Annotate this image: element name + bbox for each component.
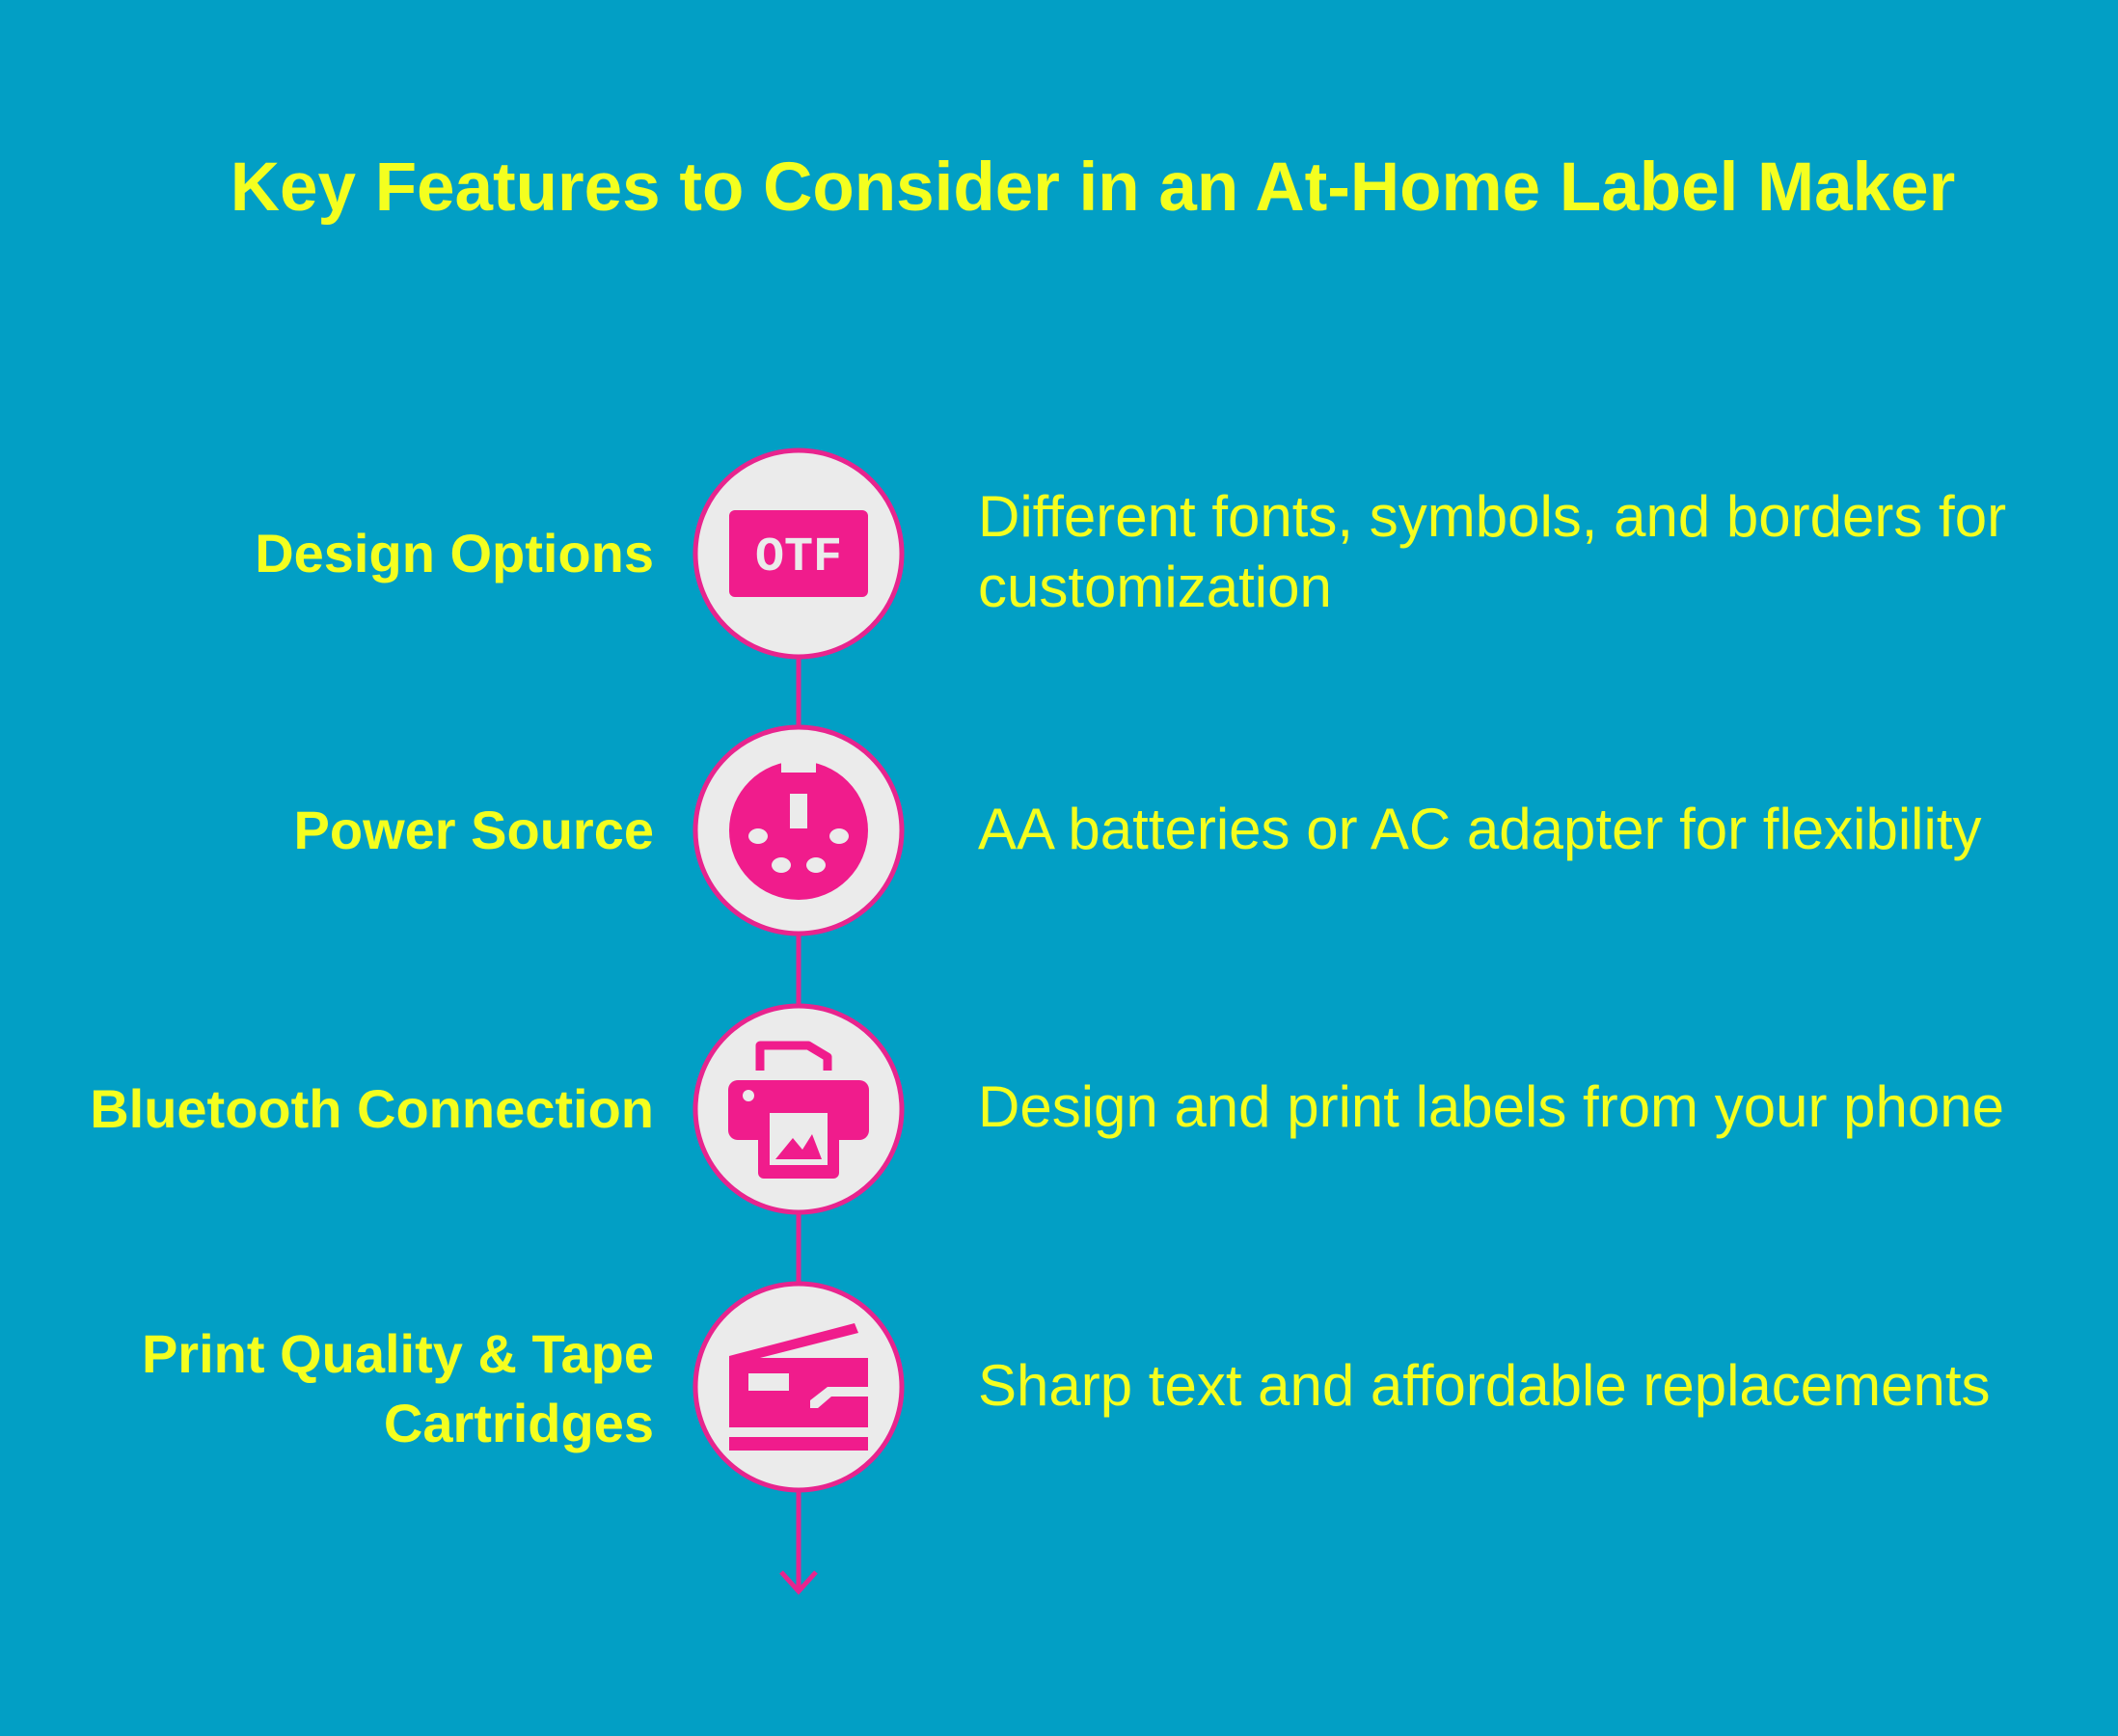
icon: OTF: OTF [755,530,842,585]
label: Print Quality: Print Quality & Tape Cartridges [142,1323,654,1453]
description: Bluetooth Connection: Design and print labels from your phone [978,1074,2004,1139]
title: Key Features to Consider in an At-Home Label Maker [231,149,1955,226]
icon: OTF [695,450,902,657]
label: Design Options: Design Options [255,523,654,583]
label: Power Source: Power Source [294,800,654,860]
icon: printer [695,1006,902,1212]
icon: scanner cartridge [695,1284,902,1490]
label: Bluetooth Connection: Bluetooth Connection [90,1078,654,1139]
description: Power Source: AA batteries or AC adapter for flexibility [978,797,1982,861]
connector line and arrow [781,656,816,1591]
description: Print Quality: Sharp text and affordable replacements [978,1353,1991,1418]
description: Design Options: Different fonts, symbols, and borders for customization [978,484,2006,619]
icon: power plug [695,727,902,934]
